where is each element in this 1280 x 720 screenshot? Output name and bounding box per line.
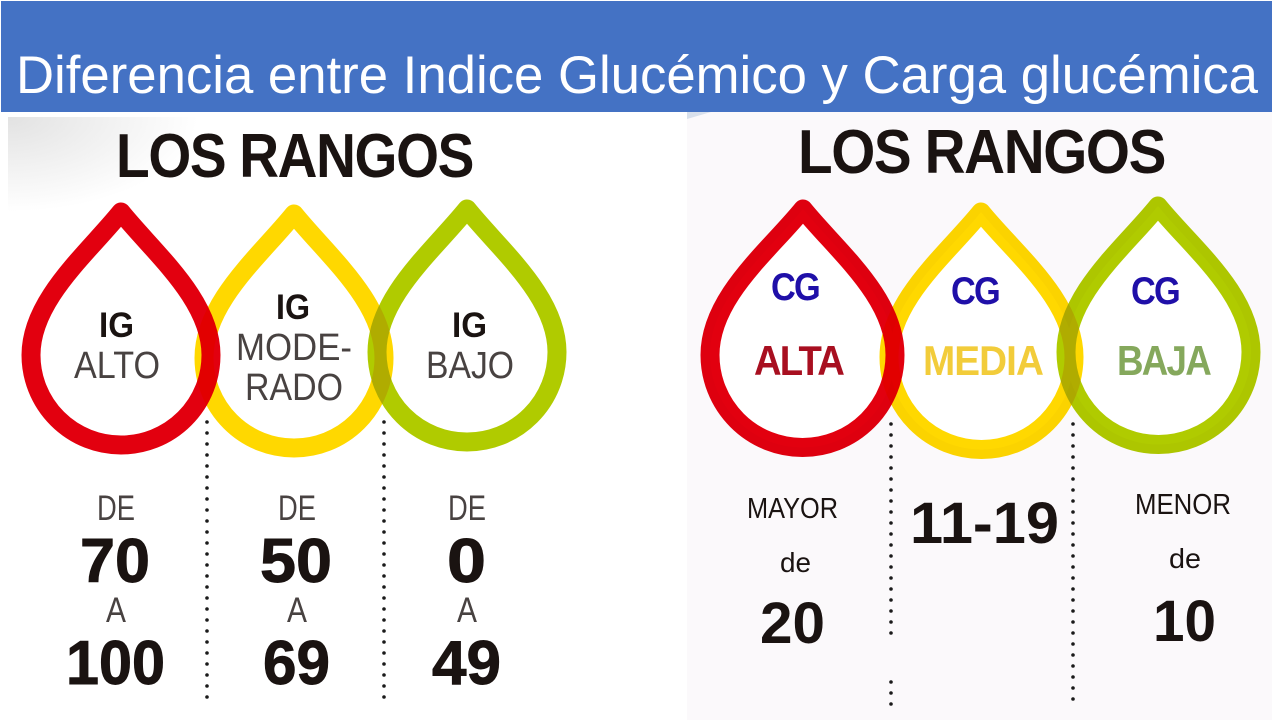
panel: left background <box>8 117 198 212</box>
label: IG bajo <box>426 306 514 387</box>
label: CG alta: ALTA <box>754 337 845 384</box>
label: IG alto: ALTO <box>74 345 160 387</box>
label: IG bajo: BAJO <box>426 345 514 387</box>
range: 0 a 49: A <box>457 591 478 630</box>
label: IG moderado: RADO <box>245 367 343 409</box>
range: 50 a 69: 50 <box>260 527 332 596</box>
range: 70 a 100: DE <box>97 489 135 528</box>
range: 0 a 49: 49 <box>432 629 501 698</box>
range: 70 a 100: A <box>106 591 127 630</box>
range: 50 a 69: 69 <box>263 629 330 698</box>
range: 50 a 69: A <box>287 591 308 630</box>
range: mayor de 20: de <box>780 547 811 578</box>
range: menor de 10: 10 <box>1153 589 1216 654</box>
label: CG media: CG <box>951 270 999 313</box>
label: IG moderado: MODE- <box>236 327 352 369</box>
panel: right background <box>687 112 1272 720</box>
range: 11-19: 11-19 <box>910 491 1059 556</box>
panel: índice glucémico ranges <box>31 122 557 700</box>
range: mayor de 20: 20 <box>760 591 825 656</box>
title banner: Diferencia entre Indice Glucémico y Carga glucémica <box>16 46 1259 105</box>
range: 70 a 100: 100 <box>66 629 165 698</box>
label: IG alto <box>74 306 160 387</box>
range: 0 a 49 <box>432 489 501 698</box>
heading: los rangos left: LOS RANGOS <box>116 122 473 191</box>
label: IG moderado <box>236 288 352 409</box>
label: CG baja: CG <box>1131 270 1179 313</box>
icon: three overlapping drops IG <box>31 209 557 448</box>
range: menor de 10 <box>1135 489 1231 654</box>
label: CG alta <box>754 266 845 384</box>
range: 70 a 100: 70 <box>80 527 150 596</box>
icon: three overlapping drops CG <box>710 206 1251 450</box>
range: mayor de 20 <box>747 493 838 656</box>
range: 70 a 100 <box>66 489 165 698</box>
label: CG media <box>923 270 1044 384</box>
range: menor de 10: MENOR <box>1135 489 1231 521</box>
range: menor de 10: de <box>1169 543 1201 574</box>
label: IG bajo: IG <box>452 306 487 345</box>
title banner <box>1 1 1272 112</box>
label: IG moderado: IG <box>276 288 310 327</box>
label: CG baja: BAJA <box>1117 337 1211 384</box>
range: 50 a 69: DE <box>278 489 316 528</box>
label: IG alto: IG <box>99 306 134 345</box>
range: mayor de 20: MAYOR <box>747 493 838 525</box>
range: 0 a 49: 0 <box>447 527 486 596</box>
range: 50 a 69 <box>260 489 332 698</box>
label: CG media: MEDIA <box>923 337 1044 384</box>
heading: los rangos right: LOS RANGOS <box>798 118 1165 187</box>
label: CG baja <box>1117 270 1211 384</box>
label: CG alta: CG <box>771 266 819 309</box>
range: 0 a 49: DE <box>448 489 486 528</box>
panel: carga glucémica ranges <box>710 118 1251 706</box>
